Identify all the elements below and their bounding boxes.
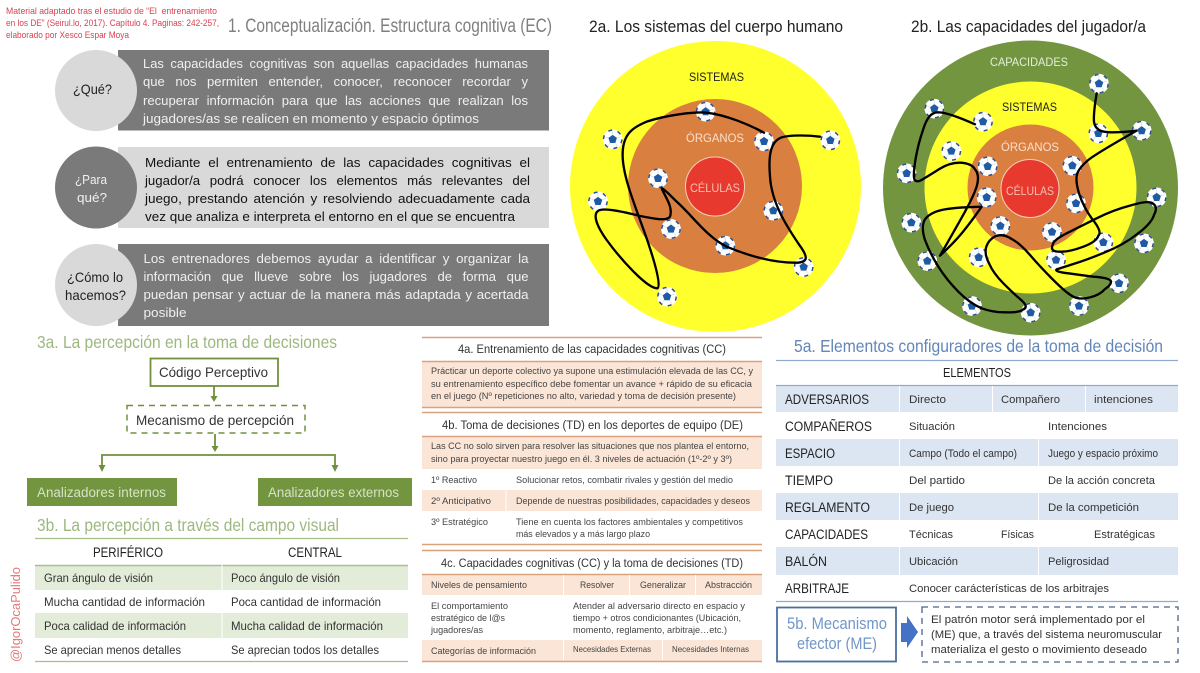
table: elementos: Directo xyxy=(909,394,946,406)
box: 5b mecanismo efector: efector (ME) xyxy=(797,635,877,653)
table: elementos: CAPACIDADES xyxy=(785,527,868,542)
callout: patrón motor xyxy=(922,607,1178,662)
table: elementos: Conocer carácterísticas de los arbitrajes xyxy=(909,583,1109,595)
panel 4a xyxy=(422,338,762,408)
panel: para qué: juego, prestando atención y resolviendo adecuadamente cada xyxy=(144,191,531,206)
diagram: capacidades del jugador: ÓRGANOS xyxy=(1001,139,1059,154)
panel: cómo lo hacemos: hacemos? xyxy=(65,288,126,303)
diagram: capacidades del jugador: CAPACIDADES xyxy=(990,55,1068,69)
panel 4c: momento, reglamento, arbitraje…etc.) xyxy=(573,625,727,636)
table: elementos: TIEMPO xyxy=(785,473,833,488)
table: campo visual: Mucha calidad de información xyxy=(231,619,383,633)
author handle: @IgorOcaPulido xyxy=(8,567,23,662)
box: 5b mecanismo efector xyxy=(777,608,896,662)
heading 2b: 2b. Las capacidades del jugador/a xyxy=(911,18,1147,36)
panel 4b: Las CC no solo sirven para resolver las situaciones que nos plantea el entorno, xyxy=(431,441,749,452)
heading 2a: 2a. Los sistemas del cuerpo humano xyxy=(589,18,843,36)
panel 4c: El comportamiento xyxy=(431,601,508,612)
diagram: sistemas del cuerpo humano: CÉLULAS xyxy=(690,180,740,195)
panel: qué: recuperar información para que las acciones que realizan los xyxy=(143,93,528,108)
panel: para qué: ¿Para xyxy=(75,172,108,187)
table: campo visual: Se aprecian todos los detalles xyxy=(231,643,379,657)
panel 4b: Tiene en cuenta los factores ambientales y competitivos xyxy=(516,517,743,528)
panel 4a: 4a. Entrenamiento de las capacidades cognitivas (CC) xyxy=(458,342,726,356)
flowchart: percepción xyxy=(27,358,412,506)
table: elementos: intenciones xyxy=(1094,394,1153,406)
diagram: sistemas del cuerpo humano: ÓRGANOS xyxy=(686,130,744,145)
panel 4c: Necesidades Externas xyxy=(573,644,651,654)
source credit: en los DE” (Seirul.lo, 2017). Capítulo 4. Paginas: 242-257, xyxy=(6,18,219,28)
heading 3a: 3a. La percepción en la toma de decisiones xyxy=(37,332,337,352)
panel 4c: estratégico de l@s xyxy=(431,613,505,624)
panel 4b: 2º Anticipativo xyxy=(431,496,491,507)
table: elementos: ELEMENTOS xyxy=(943,366,1011,380)
panel: para qué: jugador/a podrá conocer los elementos más relevantes del xyxy=(144,173,530,188)
callout: patrón motor: El patrón motor será implementado por el xyxy=(931,614,1145,626)
panel: qué: Las capacidades cognitivas son aquellas capacidades humanas xyxy=(143,56,528,71)
panel 4b: Depende de nuestras posibilidades, capacidades y deseos xyxy=(516,496,750,507)
panel: para qué: vez que analiza e interpreta el entorno en el que se encuentra xyxy=(145,209,516,224)
callout: patrón motor: (ME) que, a través del sistema neuromuscular xyxy=(931,629,1162,641)
table: elementos: De juego xyxy=(909,502,954,514)
callout: patrón motor: materializa el gesto o movimiento deseado xyxy=(931,644,1147,656)
box: 5b mecanismo efector: 5b. Mecanismo xyxy=(787,615,887,633)
panel: cómo lo hacemos: información que llueve sobre los jugadores de forma que xyxy=(144,269,528,284)
panel: cómo lo hacemos xyxy=(55,244,549,326)
panel 4c: Necesidades Internas xyxy=(672,644,749,654)
panel 4c: Atender al adversario directo en espacio y xyxy=(573,601,745,612)
table: campo visual: Mucha cantidad de información xyxy=(44,595,205,609)
panel: cómo lo hacemos: Los entrenadores debemos ayudar a identificar y organizar la xyxy=(144,251,529,266)
panel: qué: ¿Qué? xyxy=(73,82,112,97)
table: campo visual: Poca calidad de información xyxy=(44,619,186,633)
panel 4b: sino para proyectar nuestro juego en él. 3 niveles de actuación (1º-2º y 3º) xyxy=(431,454,732,465)
panel: para qué: Mediante el entrenamiento de las capacidades cognitivas el xyxy=(145,155,530,170)
arrow: mecanismo efector xyxy=(901,616,918,648)
table: elementos: Del partido xyxy=(909,475,965,487)
panel: qué: que nos permiten entender, conocer, reconocer recordar y xyxy=(143,74,528,89)
panel 4c: Resolver xyxy=(580,580,615,591)
table: campo visual: Se aprecian menos detalles xyxy=(44,643,181,657)
panel 4c: 4c. Capacidades cognitivas (CC) y la toma de decisiones (TD) xyxy=(441,556,743,570)
table: elementos xyxy=(776,360,1178,602)
panel 4b: 4b. Toma de decisiones (TD) en los deportes de equipo (DE) xyxy=(442,418,743,432)
flowchart: percepción: Mecanismo de percepción xyxy=(136,412,294,428)
flowchart: percepción: Analizadores internos xyxy=(37,485,166,500)
panel: qué: jugadores/as se realicen en momento y espacio óptimos xyxy=(142,111,479,126)
panel 4a: en el juego (Nº repeticiones no alto, variedad y toma de decisión presente) xyxy=(431,391,736,402)
panel 4b: 1º Reactivo xyxy=(431,475,477,486)
table: campo visual: Poca cantidad de información xyxy=(231,595,381,609)
table: elementos: Técnicas xyxy=(909,529,953,541)
table: elementos: ARBITRAJE xyxy=(785,581,849,596)
panel 4c: Categorías de información xyxy=(431,646,536,657)
diagram: sistemas del cuerpo humano xyxy=(570,41,861,332)
table: elementos: ADVERSARIOS xyxy=(785,392,869,407)
table: elementos: COMPAÑEROS xyxy=(785,419,872,434)
panel 4b: Solucionar retos, combatir rivales y gestión del medio xyxy=(516,475,733,486)
panel 4c: Abstracción xyxy=(705,580,752,591)
table: elementos: BALÓN xyxy=(785,554,827,569)
panel: cómo lo hacemos: ¿Cómo lo xyxy=(67,270,123,285)
panel: cómo lo hacemos: posible xyxy=(144,305,186,320)
panel 4b: 3º Estratégico xyxy=(431,517,488,528)
panel: para qué: qué? xyxy=(77,190,107,205)
panel 4c: tiempo + otros condicionantes (Ubicación, xyxy=(573,613,741,624)
table: campo visual: Poco ángulo de visión xyxy=(231,571,340,585)
panel 4a: su entrenamiento específico debe fomentar un avance + rápido de su eficacia xyxy=(431,379,753,390)
table: elementos: Ubicación xyxy=(909,556,958,568)
source credit: Material adaptado tras el estudio de “El entrenamiento xyxy=(6,6,217,16)
flowchart: percepción: Código Perceptivo xyxy=(159,364,268,380)
table: campo visual: PERIFÉRICO xyxy=(93,545,163,560)
diagram: capacidades del jugador: SISTEMAS xyxy=(1002,100,1057,114)
table: campo visual xyxy=(35,538,408,662)
heading 5a: 5a. Elementos configuradores de la toma de decisión xyxy=(794,336,1163,356)
source credit xyxy=(6,6,219,40)
table: elementos: REGLAMENTO xyxy=(785,500,870,515)
panel 4c: jugadores/as xyxy=(430,625,483,636)
table: elementos: De la competición xyxy=(1048,502,1139,514)
source credit: elaborado por Xesco Espar Moya xyxy=(6,30,130,40)
panel 4a: Prácticar un deporte colectivo ya supone una estimulación elevada de las CC, y xyxy=(431,366,753,377)
table: elementos: Intenciones xyxy=(1048,421,1107,433)
panel: para qué xyxy=(55,146,549,228)
table: campo visual: CENTRAL xyxy=(288,545,342,560)
table: elementos: Situación xyxy=(909,421,955,433)
panel 4b xyxy=(422,412,762,544)
heading 3b: 3b. La percepción a través del campo visual xyxy=(37,515,339,535)
table: elementos: De la acción concreta xyxy=(1048,475,1156,487)
diagram: sistemas del cuerpo humano: SISTEMAS xyxy=(689,70,744,84)
table: elementos: Compañero xyxy=(1001,394,1060,406)
table: elementos: Peligrosidad xyxy=(1048,556,1109,568)
flowchart: percepción: Analizadores externos xyxy=(268,485,399,500)
table: elementos: Campo (Todo el campo) xyxy=(909,448,1017,460)
panel: cómo lo hacemos: puedan pensar y actuar de la manera más adaptada y acertada xyxy=(144,287,529,302)
diagram: capacidades del jugador: CÉLULAS xyxy=(1006,183,1054,198)
panel 4c: Niveles de pensamiento xyxy=(431,580,527,591)
title: 1. Conceptualización: 1. Conceptualización. Estructura cognitiva (EC) xyxy=(228,16,552,37)
table: campo visual: Gran ángulo de visión xyxy=(44,571,153,585)
table: elementos: Físicas xyxy=(1001,529,1034,541)
table: elementos: ESPACIO xyxy=(785,446,835,461)
panel 4b: más elevados y a más largo plazo xyxy=(516,529,650,540)
panel: qué xyxy=(55,50,549,131)
panel 4c xyxy=(422,550,762,662)
table: elementos: Estratégicas xyxy=(1094,529,1155,541)
panel 4c: Generalizar xyxy=(640,580,687,591)
diagram: capacidades del jugador xyxy=(883,40,1178,336)
table: elementos: Juego y espacio próximo xyxy=(1048,448,1158,460)
